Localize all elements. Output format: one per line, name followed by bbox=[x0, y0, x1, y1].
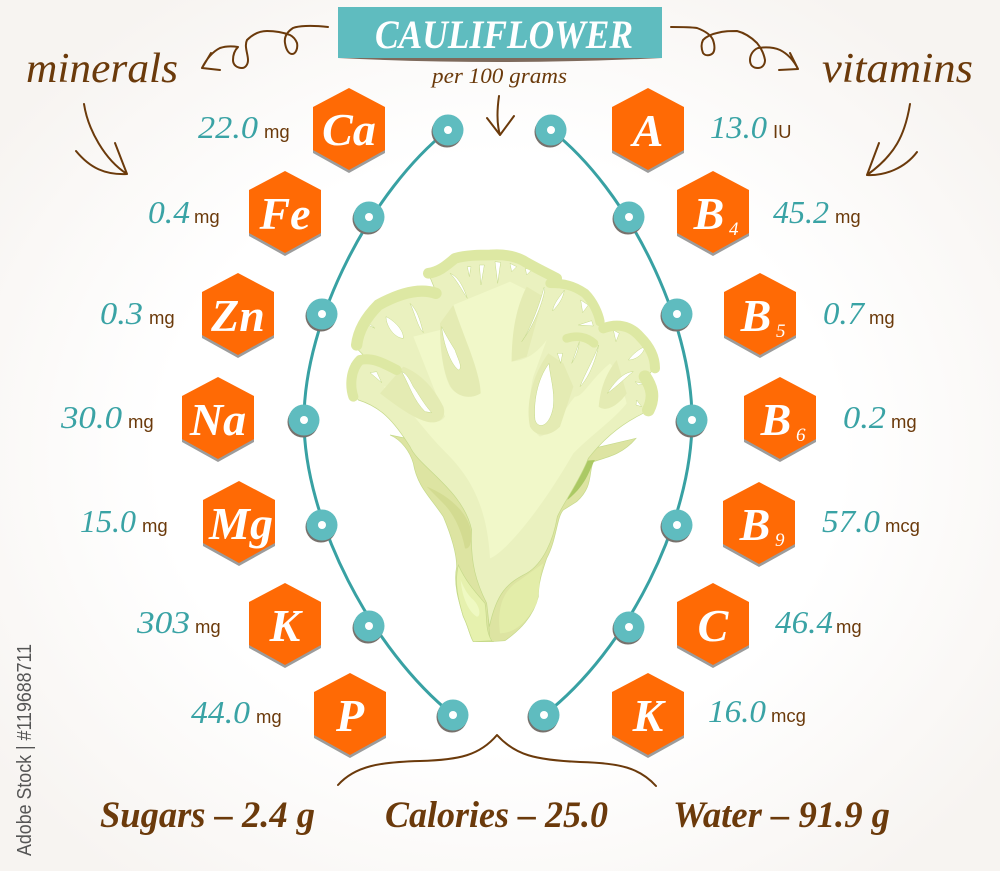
mineral: Fe: Fe bbox=[258, 188, 311, 239]
outer left leaf bbox=[390, 435, 530, 642]
arrow: title to minerals bbox=[202, 26, 328, 70]
mineral: Zn: Zn bbox=[210, 290, 265, 341]
vitamin: C: C bbox=[698, 600, 730, 651]
mineral: Mg: Mg bbox=[208, 498, 273, 549]
mineral: K bbox=[136, 583, 321, 668]
vitamin: C: mg bbox=[836, 616, 862, 637]
heading: minerals: minerals bbox=[26, 46, 178, 92]
floret crown bumps bbox=[351, 255, 655, 410]
vitamin: A: 13.0 bbox=[710, 109, 767, 145]
lower right leaf lighter inner bbox=[499, 563, 543, 633]
arrow: minerals down bbox=[76, 104, 127, 174]
vitamin: B6: mg bbox=[891, 411, 917, 432]
vitamin: K: K bbox=[632, 690, 667, 741]
arrow: vitamins down bbox=[867, 104, 917, 175]
total: water: Water – 91.9 g bbox=[673, 795, 890, 836]
vitamin: B9: mcg bbox=[885, 515, 920, 536]
cauliflower illustration bbox=[350, 252, 658, 642]
vitamin: B4: mg bbox=[835, 206, 861, 227]
mineral: Ca: 22.0 bbox=[198, 109, 258, 145]
cauliflower body bbox=[350, 252, 658, 627]
mineral: K: K bbox=[269, 600, 304, 651]
mineral: Fe: 0.4 bbox=[148, 194, 190, 230]
mineral: Zn: 0.3 bbox=[100, 295, 143, 331]
mineral: P bbox=[191, 673, 386, 758]
mineral: K: 303 bbox=[136, 604, 190, 640]
vitamin: B9: B bbox=[739, 499, 770, 550]
vitamin: A: IU bbox=[773, 121, 792, 142]
vitamin: B5: mg bbox=[869, 307, 895, 328]
mineral: Fe bbox=[148, 171, 321, 256]
total: calories: Calories – 25.0 bbox=[385, 795, 608, 836]
lower left leaf highlight bbox=[461, 580, 479, 617]
mineral: Na: Na bbox=[189, 394, 246, 445]
vitamin: B5: 0.7 bbox=[823, 295, 866, 331]
vitamin: B6: 0.2 bbox=[843, 399, 886, 435]
vitamin: K: mcg bbox=[771, 705, 806, 726]
darker band on left leaf bbox=[427, 487, 471, 549]
heading: vitamins: vitamins bbox=[822, 46, 973, 92]
mineral: Na: 30.0 bbox=[60, 399, 122, 435]
stem inner lighter area bbox=[383, 282, 627, 558]
vitamin: K: 16.0 bbox=[708, 693, 766, 729]
vitamin: B9 bbox=[723, 482, 920, 567]
arrow: title to vitamins bbox=[671, 27, 798, 70]
vitamin: B5: 5 bbox=[776, 321, 786, 342]
mineral: Ca bbox=[198, 88, 385, 173]
mineral: P: 44.0 bbox=[191, 694, 250, 730]
arrow: centre down bbox=[487, 96, 514, 135]
vitamin: B4: 4 bbox=[729, 219, 739, 240]
vitamin: B4: 45.2 bbox=[773, 194, 829, 230]
vitamin: A bbox=[612, 88, 792, 173]
mineral: Mg bbox=[80, 481, 275, 566]
vitamin: B6: B bbox=[760, 394, 791, 445]
white gaps between florets bbox=[368, 262, 645, 425]
vitamin: A: A bbox=[630, 105, 663, 156]
vitamin: B5 bbox=[724, 273, 895, 358]
body shade folds bbox=[380, 287, 627, 435]
vitamin: B6 bbox=[744, 377, 917, 462]
outer right leaf bbox=[487, 438, 636, 642]
subtitle: per 100 grams: per 100 grams bbox=[430, 63, 567, 88]
mineral: Na: mg bbox=[128, 411, 154, 432]
mineral: Zn bbox=[100, 273, 274, 358]
total: sugars: Sugars – 2.4 g bbox=[100, 795, 315, 836]
mineral: Ca: Ca bbox=[322, 104, 376, 155]
mineral: K: mg bbox=[195, 616, 221, 637]
vitamin: C: 46.4 bbox=[775, 604, 833, 640]
vitamin: C bbox=[677, 583, 862, 668]
mineral: Mg: 15.0 bbox=[80, 503, 136, 539]
lower left leaf piece bbox=[457, 565, 492, 642]
title banner: CAULIFLOWER bbox=[375, 12, 633, 57]
minerals column bbox=[60, 88, 386, 758]
mineral: Ca: mg bbox=[264, 121, 290, 142]
mineral: P: P bbox=[335, 690, 365, 741]
vitamin: B5: B bbox=[740, 290, 771, 341]
mineral: Mg: mg bbox=[142, 515, 168, 536]
connecting oval with nodes bbox=[288, 114, 708, 732]
mineral: Na bbox=[60, 377, 254, 462]
stock id side label: Adobe Stock | #119688711 bbox=[14, 644, 36, 856]
vitamin: B4: B bbox=[693, 188, 724, 239]
brace above totals bbox=[338, 735, 656, 786]
vitamin: B9: 57.0 bbox=[822, 503, 880, 539]
mineral: Fe: mg bbox=[194, 206, 220, 227]
vitamin: B6: 6 bbox=[796, 425, 806, 446]
dark green leaf accent bbox=[567, 460, 595, 500]
vitamins column bbox=[612, 88, 920, 758]
mineral: Zn: mg bbox=[149, 307, 175, 328]
vitamin: B9: 9 bbox=[775, 530, 785, 551]
vitamin: K bbox=[612, 673, 806, 758]
mineral: P: mg bbox=[256, 706, 282, 727]
vitamin: B4 bbox=[677, 171, 861, 256]
